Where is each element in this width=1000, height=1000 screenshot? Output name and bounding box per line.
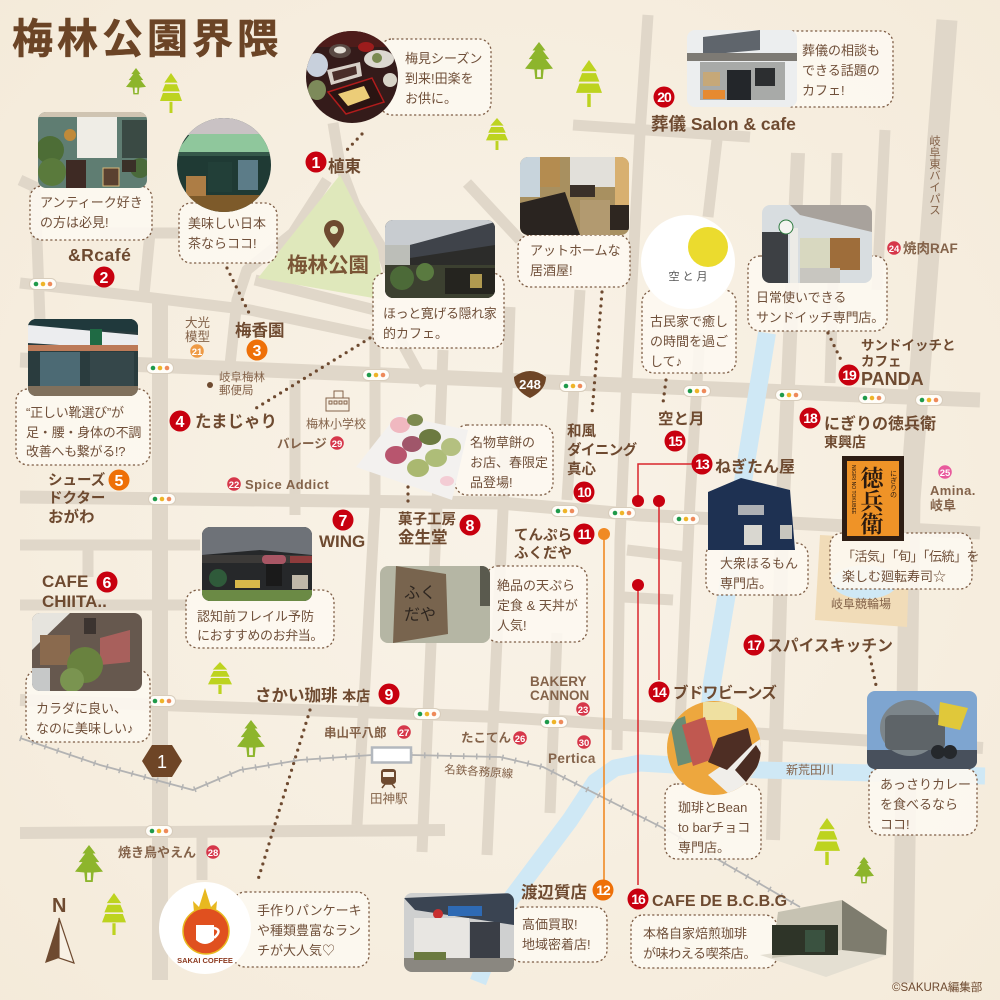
red numbered markers: 14 — [652, 684, 667, 700]
bubble — [186, 590, 334, 648]
trees — [75, 42, 874, 935]
caption: が味わえる喫茶店。 — [643, 946, 756, 961]
caption: 楽しむ廻転寿司☆ — [842, 569, 946, 584]
minor place labels: バレージ — [277, 437, 327, 451]
bubble — [706, 543, 808, 595]
photo: food — [306, 31, 398, 123]
panel: 4 たまじゃり — [373, 220, 504, 348]
caption: あっさりカレー — [880, 777, 971, 792]
small numbered markers: 25 — [940, 468, 951, 479]
photo: tea shop — [176, 118, 272, 212]
photo: cafe front — [385, 220, 495, 298]
route 248 shield: 248 — [519, 377, 541, 392]
photo: wood sign: だや — [404, 606, 436, 624]
photo: bento shop — [202, 527, 312, 601]
shop names: おがわ — [48, 507, 95, 526]
pond — [832, 565, 898, 599]
small numbered markers — [190, 241, 952, 859]
red numbered markers: 7 — [339, 513, 348, 530]
red numbered markers: 13 — [695, 456, 710, 472]
caption: して♪ — [650, 354, 682, 369]
title: 梅林公園界隈 — [12, 16, 282, 62]
caption: 美味しい日本 — [188, 216, 266, 231]
minor place labels: 名鉄各務原線 — [444, 762, 514, 781]
shop names: CAFE — [42, 572, 88, 591]
compass: north arrow — [45, 895, 74, 963]
minor place labels: たこてん — [461, 731, 511, 745]
route 248 shield — [514, 371, 546, 398]
caption: を食べるなら — [880, 797, 958, 812]
minor place labels: 模型 — [185, 330, 210, 344]
sign: 徳兵衛: 徳 — [860, 460, 886, 493]
caption: 地域密着店! — [522, 937, 591, 952]
panel: 10 和風ダイニング真心 — [518, 157, 630, 287]
minor place labels: 梅林小学校 — [306, 416, 366, 431]
minor place labels: 田神駅 — [370, 791, 408, 806]
panel: 20 葬儀 Salon & cafe — [687, 30, 893, 107]
bubble — [830, 533, 972, 589]
minor place labels: BAKERY — [530, 674, 587, 689]
small numbered markers: 30 — [579, 738, 589, 749]
traffic signals — [30, 278, 942, 836]
red numbered markers: 11 — [578, 526, 592, 542]
caption: チが大人気♡ — [257, 943, 335, 958]
shop names: &Rcafé — [68, 245, 131, 265]
caption: なのに美味しい♪ — [36, 721, 134, 736]
panel: 9 さかい珈琲 — [159, 882, 369, 974]
caption: カラダに良い、 — [36, 701, 127, 716]
caption: ココ! — [880, 817, 910, 832]
minor place labels: 焼き鳥やえん — [118, 845, 196, 860]
caption: 品登場! — [470, 475, 513, 490]
sign: 徳兵衛: NIGIRI NO TOKUBEE — [850, 465, 856, 515]
shop names: にぎりの徳兵衛 — [824, 414, 936, 433]
connector lines with dots — [598, 464, 702, 885]
logo: moon — [641, 215, 735, 309]
photo: wood sign: ふく — [404, 585, 436, 602]
shop names: 渡辺質店 — [521, 882, 587, 902]
shop names: 菓子工房 — [398, 511, 456, 528]
bubble — [869, 768, 977, 835]
photo: chocolate — [667, 701, 761, 795]
sign: 徳兵衛: にぎりの — [890, 470, 897, 498]
panel: 11 てんぷらふくだや — [380, 566, 587, 643]
red numbered markers: 10 — [577, 484, 592, 500]
caption: 到来!田楽を — [405, 71, 474, 86]
park pin icon — [324, 220, 344, 248]
shop names: ドクター — [48, 490, 105, 507]
caption: 梅見シーズン — [405, 51, 482, 66]
shop names: さかい珈琲 本店 — [255, 686, 370, 705]
park: 梅林公園 — [258, 175, 385, 300]
bubble — [373, 273, 504, 348]
shop names: 葬儀 Salon & cafe — [651, 114, 796, 134]
panel: 7 WING — [186, 527, 334, 648]
panel: 8 菓子工房金生堂 — [356, 414, 553, 500]
bubble — [642, 290, 736, 373]
panel: 18 にぎりの徳兵衛 — [830, 456, 979, 589]
bubble — [380, 39, 491, 115]
caption: “正しい靴選び”が — [26, 405, 124, 420]
small numbered markers: 22 — [229, 480, 239, 491]
red numbered markers: 19 — [842, 367, 857, 383]
panel: 17 スパイスキッチン — [867, 691, 977, 835]
caption: 大衆ほるもん — [720, 556, 798, 571]
station marker — [372, 748, 411, 762]
shop names: CHIITA.. — [42, 592, 107, 611]
railway: 名鉄各務原線 — [20, 738, 800, 907]
caption: アットホームな — [530, 243, 621, 258]
caption: 定食 & 天丼が — [497, 598, 578, 613]
bubble — [631, 915, 777, 968]
small numbered markers: 29 — [332, 439, 342, 450]
shop names: ふくだや — [514, 545, 572, 562]
bubble — [748, 256, 887, 331]
small numbered markers: 28 — [208, 848, 218, 859]
caption: アンティーク好き — [40, 195, 143, 210]
shop names — [42, 114, 956, 910]
compass: north arrow: N — [52, 895, 66, 917]
small numbered markers: 24 — [889, 244, 900, 255]
shop names: 東興店 — [824, 434, 866, 450]
caption: 日常使いできる — [756, 290, 846, 305]
minor place labels: 岐阜競輪場 — [831, 597, 891, 611]
minor place labels — [118, 135, 976, 860]
shop names: ダイニング — [567, 441, 638, 459]
small numbered markers: 23 — [578, 705, 588, 716]
minor place labels: Pertica — [548, 751, 596, 766]
bubble — [233, 892, 369, 967]
shop names: ブドワビーンズ — [673, 683, 777, 702]
caption: 珈琲とBean — [678, 800, 747, 815]
caption: 「活気」「旬」「伝統」を — [842, 549, 979, 564]
shop names: サンドイッチと — [861, 338, 956, 353]
caption: カフェ! — [802, 83, 845, 98]
minor place labels: Amina. — [930, 483, 976, 498]
minor place labels: Spice Addict — [245, 477, 329, 492]
small numbered markers: 21 — [192, 347, 203, 358]
shop names: てんぷら — [514, 527, 572, 544]
caption: 葬儀の相談も — [802, 43, 880, 58]
photo: pawn shop — [404, 893, 514, 972]
route 1 hexagon: 1 — [157, 752, 167, 772]
logo: Sakai Coffee: SAKAI COFFEE — [177, 956, 233, 965]
red numbered markers — [94, 86, 860, 910]
sign: 徳兵衛: 衛 — [860, 506, 884, 539]
caption: ほっと寛げる隠れ家 — [383, 306, 497, 321]
panel: 12 渡辺質店 — [404, 893, 607, 972]
shop names: 和風 — [567, 423, 596, 440]
photo: interior — [520, 157, 629, 235]
photo: sandwich shop — [762, 205, 872, 283]
minor place labels: 焼肉RAF — [903, 241, 958, 256]
copyright: ©SAKURA編集部 — [892, 980, 983, 994]
caption: の方は必見! — [40, 215, 109, 230]
caption: 本格自家焙煎珈琲 — [643, 926, 747, 941]
velodrome area: 岐阜競輪場 — [815, 535, 910, 627]
caption: サンドイッチ専門店。 — [756, 310, 884, 325]
caption: 古民家で癒し — [650, 314, 728, 329]
photo: shoe shop — [28, 319, 138, 396]
river: 新荒田川 — [478, 333, 985, 982]
bubble — [510, 907, 607, 962]
bubble — [486, 566, 587, 642]
red numbered markers: 4 — [176, 414, 185, 431]
minor place labels: 大光 — [185, 316, 210, 330]
park name: 梅林公園 — [287, 254, 369, 277]
logo: moon: 空 と 月 — [668, 270, 708, 283]
red numbered markers: 5 — [115, 473, 124, 490]
shop names: CAFE DE B.C.B.G — [652, 893, 787, 910]
dotted leader lines — [227, 134, 877, 883]
bubble — [30, 186, 152, 240]
caption: 的カフェ。 — [383, 326, 448, 341]
photo: wooden cafe — [32, 613, 142, 692]
minor place labels: 新荒田川 — [786, 763, 834, 777]
shop names: WING — [319, 532, 365, 551]
sign: 徳兵衛 — [842, 456, 904, 541]
caption: お店、春限定 — [470, 455, 548, 470]
photo: wood sign — [380, 566, 490, 643]
minor place labels: 岐阜東バイパス — [928, 135, 941, 216]
red numbered markers: 8 — [466, 518, 475, 535]
red numbered markers: 17 — [747, 637, 762, 653]
red numbered markers: 18 — [803, 410, 818, 426]
panel: 2 &R café — [30, 112, 152, 240]
shop names: 植東 — [328, 157, 362, 176]
panel: 14 ブドワビーンズ — [664, 701, 762, 860]
red numbered markers: 2 — [100, 270, 109, 287]
photo: kusamochi plate — [356, 414, 468, 500]
panel: 15 空と月 — [641, 215, 736, 373]
caption: 茶ならココ! — [188, 236, 257, 251]
small numbered markers: 26 — [515, 734, 525, 745]
shop names: 空と月 — [658, 409, 705, 428]
photo: salon front — [687, 30, 797, 107]
caption: 人気! — [497, 618, 527, 633]
minor place labels: 串山平八郎 — [324, 725, 387, 740]
bubble — [16, 389, 150, 465]
panel: 1 植東 — [306, 31, 491, 123]
shop names: カフェ — [861, 354, 902, 369]
caption: 高価買取! — [522, 917, 578, 932]
red numbered markers: 20 — [657, 89, 672, 105]
red numbered markers: 15 — [668, 433, 683, 449]
bubble — [780, 31, 893, 107]
photo: navy building — [708, 478, 795, 550]
minor place labels: 岐阜 — [930, 498, 956, 513]
bubble — [179, 203, 277, 263]
shop names: ねぎたん屋 — [715, 457, 795, 476]
caption: 足・腰・身体の不調 — [26, 425, 141, 440]
caption: 改善へも繋がる!? — [26, 444, 125, 459]
icon: train — [381, 769, 396, 788]
panel: 5 シューズドクターおがわ — [16, 319, 150, 465]
photo: food trailer — [867, 691, 977, 769]
caption: 名物草餅の — [470, 435, 535, 450]
red numbered markers: 9 — [385, 687, 394, 704]
caption: の時間を過ご — [650, 334, 728, 349]
shop names: 梅香園 — [235, 321, 284, 340]
caption: 居酒屋! — [530, 263, 573, 278]
caption: や種類豊富なラン — [257, 923, 361, 938]
caption: できる話題の — [802, 63, 880, 78]
caption: におすすめのお弁当。 — [197, 628, 323, 643]
logo: Sakai Coffee — [159, 882, 251, 974]
bubble — [665, 784, 761, 859]
caption: 専門店。 — [678, 840, 730, 855]
bubble — [26, 670, 150, 742]
small numbered markers: 27 — [399, 728, 409, 739]
red numbered markers: 1 — [312, 155, 321, 172]
caption: 絶品の天ぷら — [497, 578, 575, 593]
minor place labels: CANNON — [530, 688, 589, 703]
shop names: 真心 — [567, 460, 596, 478]
panel: 16 CAFE DE B.C.B.G — [631, 900, 887, 977]
caption: 手作りパンケーキ — [257, 903, 362, 918]
shop names: PANDA — [861, 369, 924, 389]
panel: 13 ねぎたん屋 — [706, 478, 808, 595]
sign: 徳兵衛: 兵 — [860, 483, 884, 516]
red numbered markers: 3 — [253, 343, 262, 360]
shop names: たまじゃり — [195, 412, 277, 431]
photo: shop front — [36, 112, 150, 188]
shop names: 金生堂 — [398, 527, 448, 547]
red numbered markers: 12 — [596, 882, 611, 898]
caption: 専門店。 — [720, 576, 772, 591]
panel: 19 PANDA — [748, 205, 887, 331]
minor place labels: 郵便局 — [219, 384, 254, 397]
icon: elementary school — [326, 391, 349, 411]
red numbered markers: 6 — [103, 575, 112, 592]
shop names: シューズ — [48, 471, 106, 489]
shop names: スパイスキッチン — [767, 637, 893, 655]
red numbered markers: 16 — [631, 891, 646, 907]
photo: cafe building — [760, 900, 887, 977]
panel: 6 CAFE CHIITA.. — [26, 613, 150, 742]
caption: お供に。 — [405, 91, 457, 106]
bubble — [518, 235, 630, 287]
caption: to barチョコ — [678, 820, 750, 835]
route 1 hexagon — [142, 745, 182, 777]
minor place labels: 岐阜梅林 — [219, 370, 265, 384]
panel: 3 梅香園 — [176, 118, 277, 263]
bubble — [455, 425, 553, 495]
caption: 認知前フレイル予防 — [197, 609, 314, 624]
